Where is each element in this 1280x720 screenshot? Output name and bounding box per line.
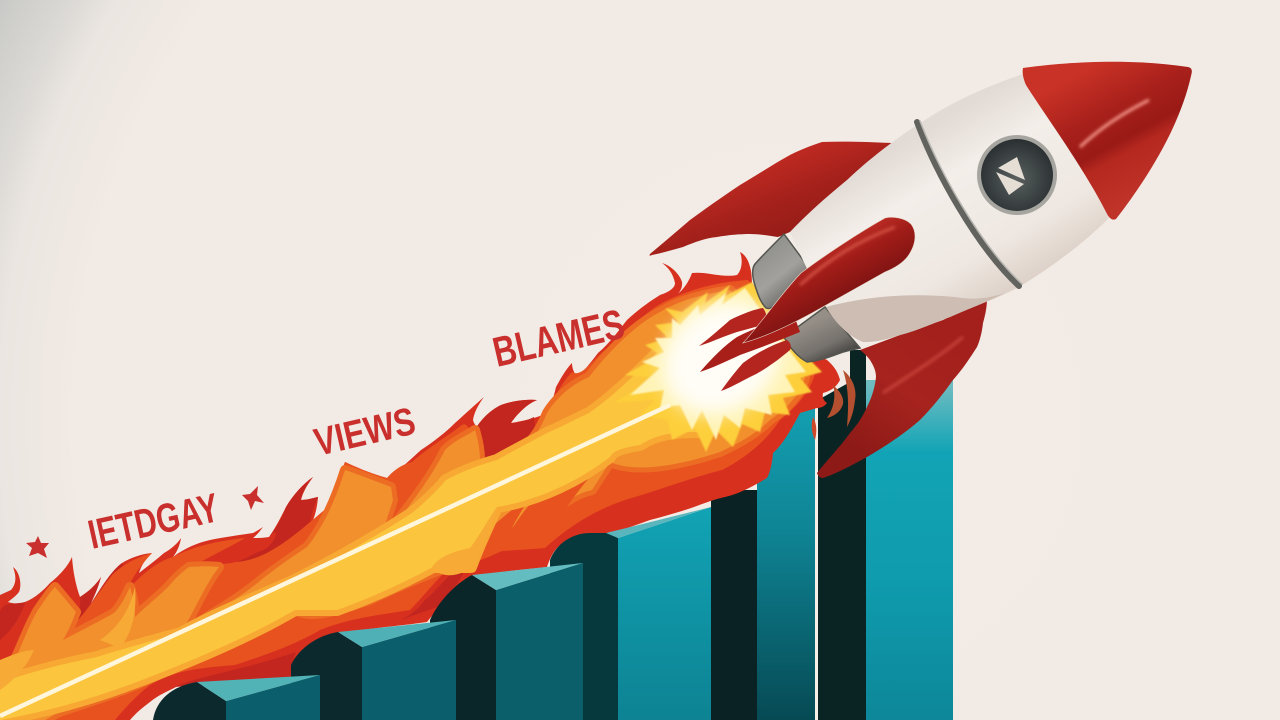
flame: dark red licks [0, 400, 537, 686]
flame: orange-red layer [0, 280, 816, 720]
flame: engine corona [615, 282, 822, 452]
rocket body [790, 73, 1109, 342]
flame: white streak [0, 405, 670, 716]
body ring [917, 121, 1022, 286]
porthole emblem [996, 157, 1025, 195]
bar 1 [153, 675, 320, 720]
tall bars behind the flame [711, 350, 953, 720]
center tank fin [743, 217, 915, 343]
label: BLAMES: BLAMES [488, 300, 629, 376]
nose cone [1023, 62, 1192, 220]
flame: engine-side flame claws [827, 370, 856, 427]
flame: outer red silhouette [0, 252, 840, 720]
flame: yellow core [0, 340, 760, 720]
rocket [650, 62, 1192, 478]
side thrusters [699, 308, 800, 391]
flame: small claw [812, 417, 816, 440]
stepped bars in front of the flame [153, 507, 711, 720]
divider [815, 405, 818, 720]
flame trail [0, 252, 856, 720]
icon: star left [26, 536, 49, 558]
rear nozzle collar [753, 234, 860, 362]
bottom fin [817, 298, 987, 478]
flame: pale corona [630, 288, 806, 440]
bar 6 [818, 350, 953, 720]
bar 4 [550, 507, 711, 720]
porthole [977, 135, 1057, 215]
icon: star right [242, 486, 264, 510]
flame: lower tongue [432, 457, 610, 572]
tank highlight [800, 227, 895, 285]
body shading [826, 293, 1005, 342]
bottom fin highlight [883, 337, 963, 393]
label: IETDGAY: IETDGAY [84, 484, 223, 558]
nose highlight [1080, 100, 1149, 147]
flame: white-hot glow [641, 279, 803, 437]
bar 3 [430, 563, 583, 720]
flame: light licks [0, 507, 497, 690]
label: VIEWS: VIEWS [310, 400, 419, 465]
bar 2 [291, 620, 456, 720]
flame: orange layer [0, 290, 805, 720]
top fin [650, 142, 892, 256]
bar 5 [711, 407, 815, 720]
